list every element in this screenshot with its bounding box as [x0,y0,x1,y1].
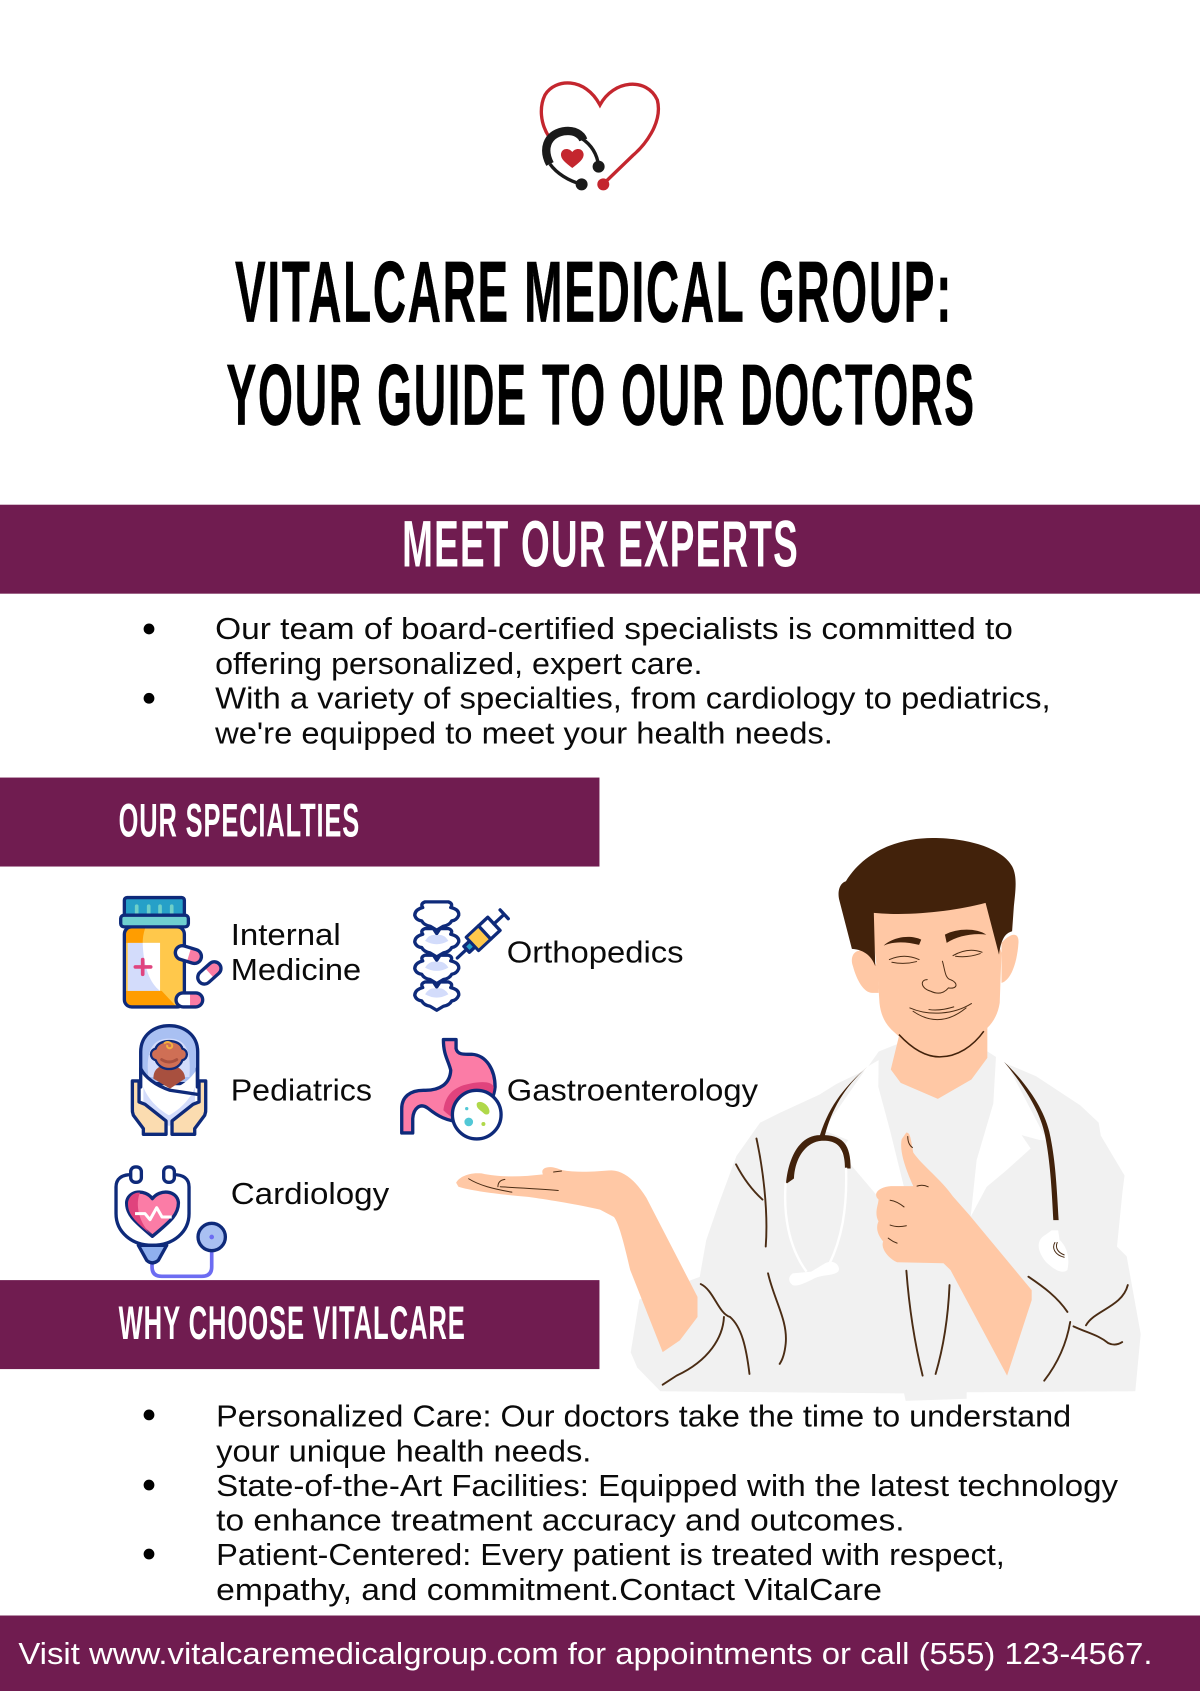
banner: why choose vitalcare [0,1280,599,1369]
icon: pediatrics baby in hands [132,1026,206,1134]
text block: experts bullets: offering personalized, expert care. [215,646,702,681]
icon: internal medicine bottle and pills [121,898,224,1007]
icon: orthopedics spine and syringe [415,902,510,1010]
hair [839,838,1016,966]
stethoscope [786,1062,1059,1220]
text block: why choose bullets [144,1398,1119,1607]
text block: why choose bullets: Patient-Centered: Every patient is treated with respect, [216,1537,1005,1572]
banner: meet our experts: MEET OUR EXPERTS [402,507,799,581]
text block: why choose bullets: to enhance treatment accuracy and outcomes. [216,1503,905,1538]
text block: experts bullets: With a variety of specialties, from cardiology to pediatrics, [215,681,1051,716]
text block: experts bullets: we're equipped to meet your health needs. [214,716,833,751]
white coat [631,1041,1141,1401]
head and face [839,838,1019,1099]
banner: our specialties [0,778,599,867]
text block: experts bullets [144,611,1051,751]
eyebrows [884,930,986,946]
label: pediatrics: Pediatrics [231,1073,372,1108]
title [226,244,976,443]
label: internal medicine: Internal [231,917,341,952]
text block: why choose bullets: Personalized Care: Our doctors take the time to understand [216,1398,1071,1433]
label: cardiology: Cardiology [231,1176,390,1211]
label: gastroenterology: Gastroenterology [507,1073,759,1108]
text block: why choose bullets: your unique health needs. [216,1433,591,1468]
stethoscope tubes and chest piece [785,1168,1068,1286]
label: internal medicine [231,917,361,987]
footer: contact band [0,1616,1200,1691]
eyes nose and smile [889,950,982,993]
banner: meet our experts [0,505,1200,594]
label: orthopedics: Orthopedics [507,935,684,970]
label: internal medicine: Medicine [231,952,361,987]
illustration: doctor [456,838,1141,1401]
lapels [823,1057,1047,1217]
footer: contact band: Visit www.vitalcaremedicalgroup.com for appointments or call (555) 123-4567. [18,1636,1153,1671]
logo: heart with stethoscope [541,83,658,190]
banner: why choose vitalcare: WHY CHOOSE VITALCARE [119,1297,466,1350]
banner: our specialties: OUR SPECIALTIES [119,794,360,847]
arm and open hand [456,1139,1128,1385]
text block: why choose bullets: State-of-the-Art Facilities: Equipped with the latest technology [216,1468,1119,1503]
text block: experts bullets: Our team of board-certified specialists is committed to [215,611,1013,646]
text block: why choose bullets: empathy, and commitment.Contact VitalCare [216,1572,882,1607]
icon: cardiology stethoscope with heart [116,1167,225,1276]
thumbs up arm [876,1132,1032,1376]
icon: gastroenterology stomach [402,1040,501,1139]
